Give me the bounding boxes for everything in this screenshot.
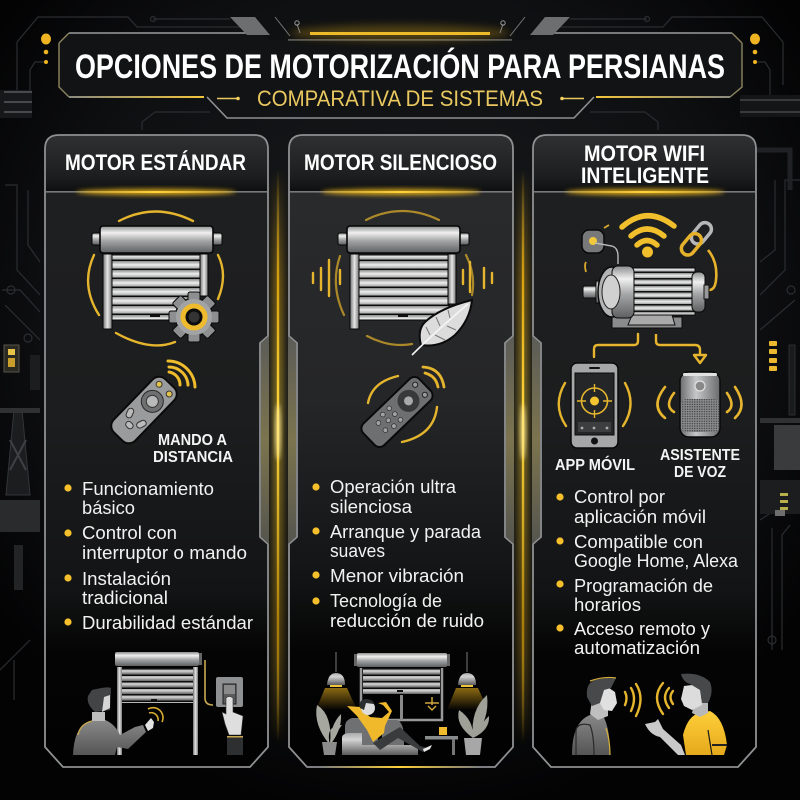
scene: two people talking (572, 674, 727, 755)
label: mando a distancia: MANDO A (158, 432, 227, 449)
panel: motor silencioso (288, 135, 514, 768)
arrow: motor to app (594, 334, 638, 357)
feature list: interruptor o mando (82, 542, 247, 563)
heading: MOTOR ESTÁNDAR (65, 150, 246, 175)
feature list: tradicional (82, 587, 168, 608)
heading (581, 141, 709, 188)
feature list: silenciosa (330, 496, 413, 517)
heading: INTELIGENTE (581, 163, 709, 188)
icon: chip (582, 225, 618, 272)
feature list: Instalación (82, 568, 171, 589)
label: asistente de voz (660, 447, 740, 481)
feature list: básico (82, 497, 135, 518)
label: asistente de voz: ASISTENTE (660, 447, 740, 464)
icon: smart speaker (658, 372, 742, 437)
left machinery (0, 90, 40, 590)
feature list: Google Home, Alexa (574, 550, 739, 571)
icon: wifi (622, 216, 674, 258)
feature list: Control con (82, 522, 177, 543)
panel: motor estándar (45, 135, 269, 767)
icon: gear (169, 292, 219, 342)
label: asistente de voz: DE VOZ (674, 464, 726, 481)
right machinery (720, 95, 800, 516)
label: app móvil: APP MÓVIL (555, 456, 635, 474)
feature list: Operación ultra (330, 476, 457, 497)
feature list: suaves (330, 540, 385, 561)
feature list: Funcionamiento (82, 478, 214, 499)
feature list: reducción de ruido (330, 610, 484, 631)
corner lights (41, 34, 760, 64)
feature list (556, 486, 739, 658)
scene: user at shutter (73, 652, 243, 755)
feature list: automatización (574, 637, 700, 658)
feature list: Menor vibración (330, 565, 464, 586)
feature list: Arranque y parada (330, 521, 482, 542)
feature list: Durabilidad estándar (82, 612, 253, 633)
indicator lights left (4, 345, 19, 372)
subtitle: COMPARATIVA DE SISTEMAS (257, 86, 543, 111)
feature list: Acceso remoto y (574, 618, 711, 639)
icon: motor (583, 266, 709, 328)
heading: MOTOR WIFI (584, 141, 705, 166)
feature list: Control por (574, 486, 665, 507)
icon: smartphone (559, 363, 631, 448)
label: mando a distancia: DISTANCIA (153, 449, 233, 466)
icon: shutter with gear (88, 212, 223, 345)
icon: remote (108, 361, 195, 447)
icon: quiet shutter with feather (313, 211, 492, 355)
title banner (59, 17, 742, 118)
feature list: aplicación móvil (574, 506, 706, 527)
icon: remote (359, 367, 444, 450)
feature list (312, 476, 484, 631)
indicator lights right (769, 341, 777, 371)
arrow: motor to voice assistant (656, 334, 706, 363)
feature list: Tecnología de (330, 590, 442, 611)
heading: MOTOR SILENCIOSO (304, 150, 497, 175)
label: mando a distancia (153, 432, 233, 466)
feature list: horarios (574, 594, 641, 615)
feature list: Programación de (574, 575, 713, 596)
feature list (64, 478, 253, 633)
icon: chain link (679, 220, 716, 290)
gold divider left (273, 170, 283, 742)
icon: feather (412, 300, 472, 355)
scene: relaxing on sofa (316, 652, 489, 755)
panel: motor wifi inteligente (532, 135, 756, 767)
feature list: Compatible con (574, 531, 703, 552)
gold divider right (518, 170, 528, 742)
